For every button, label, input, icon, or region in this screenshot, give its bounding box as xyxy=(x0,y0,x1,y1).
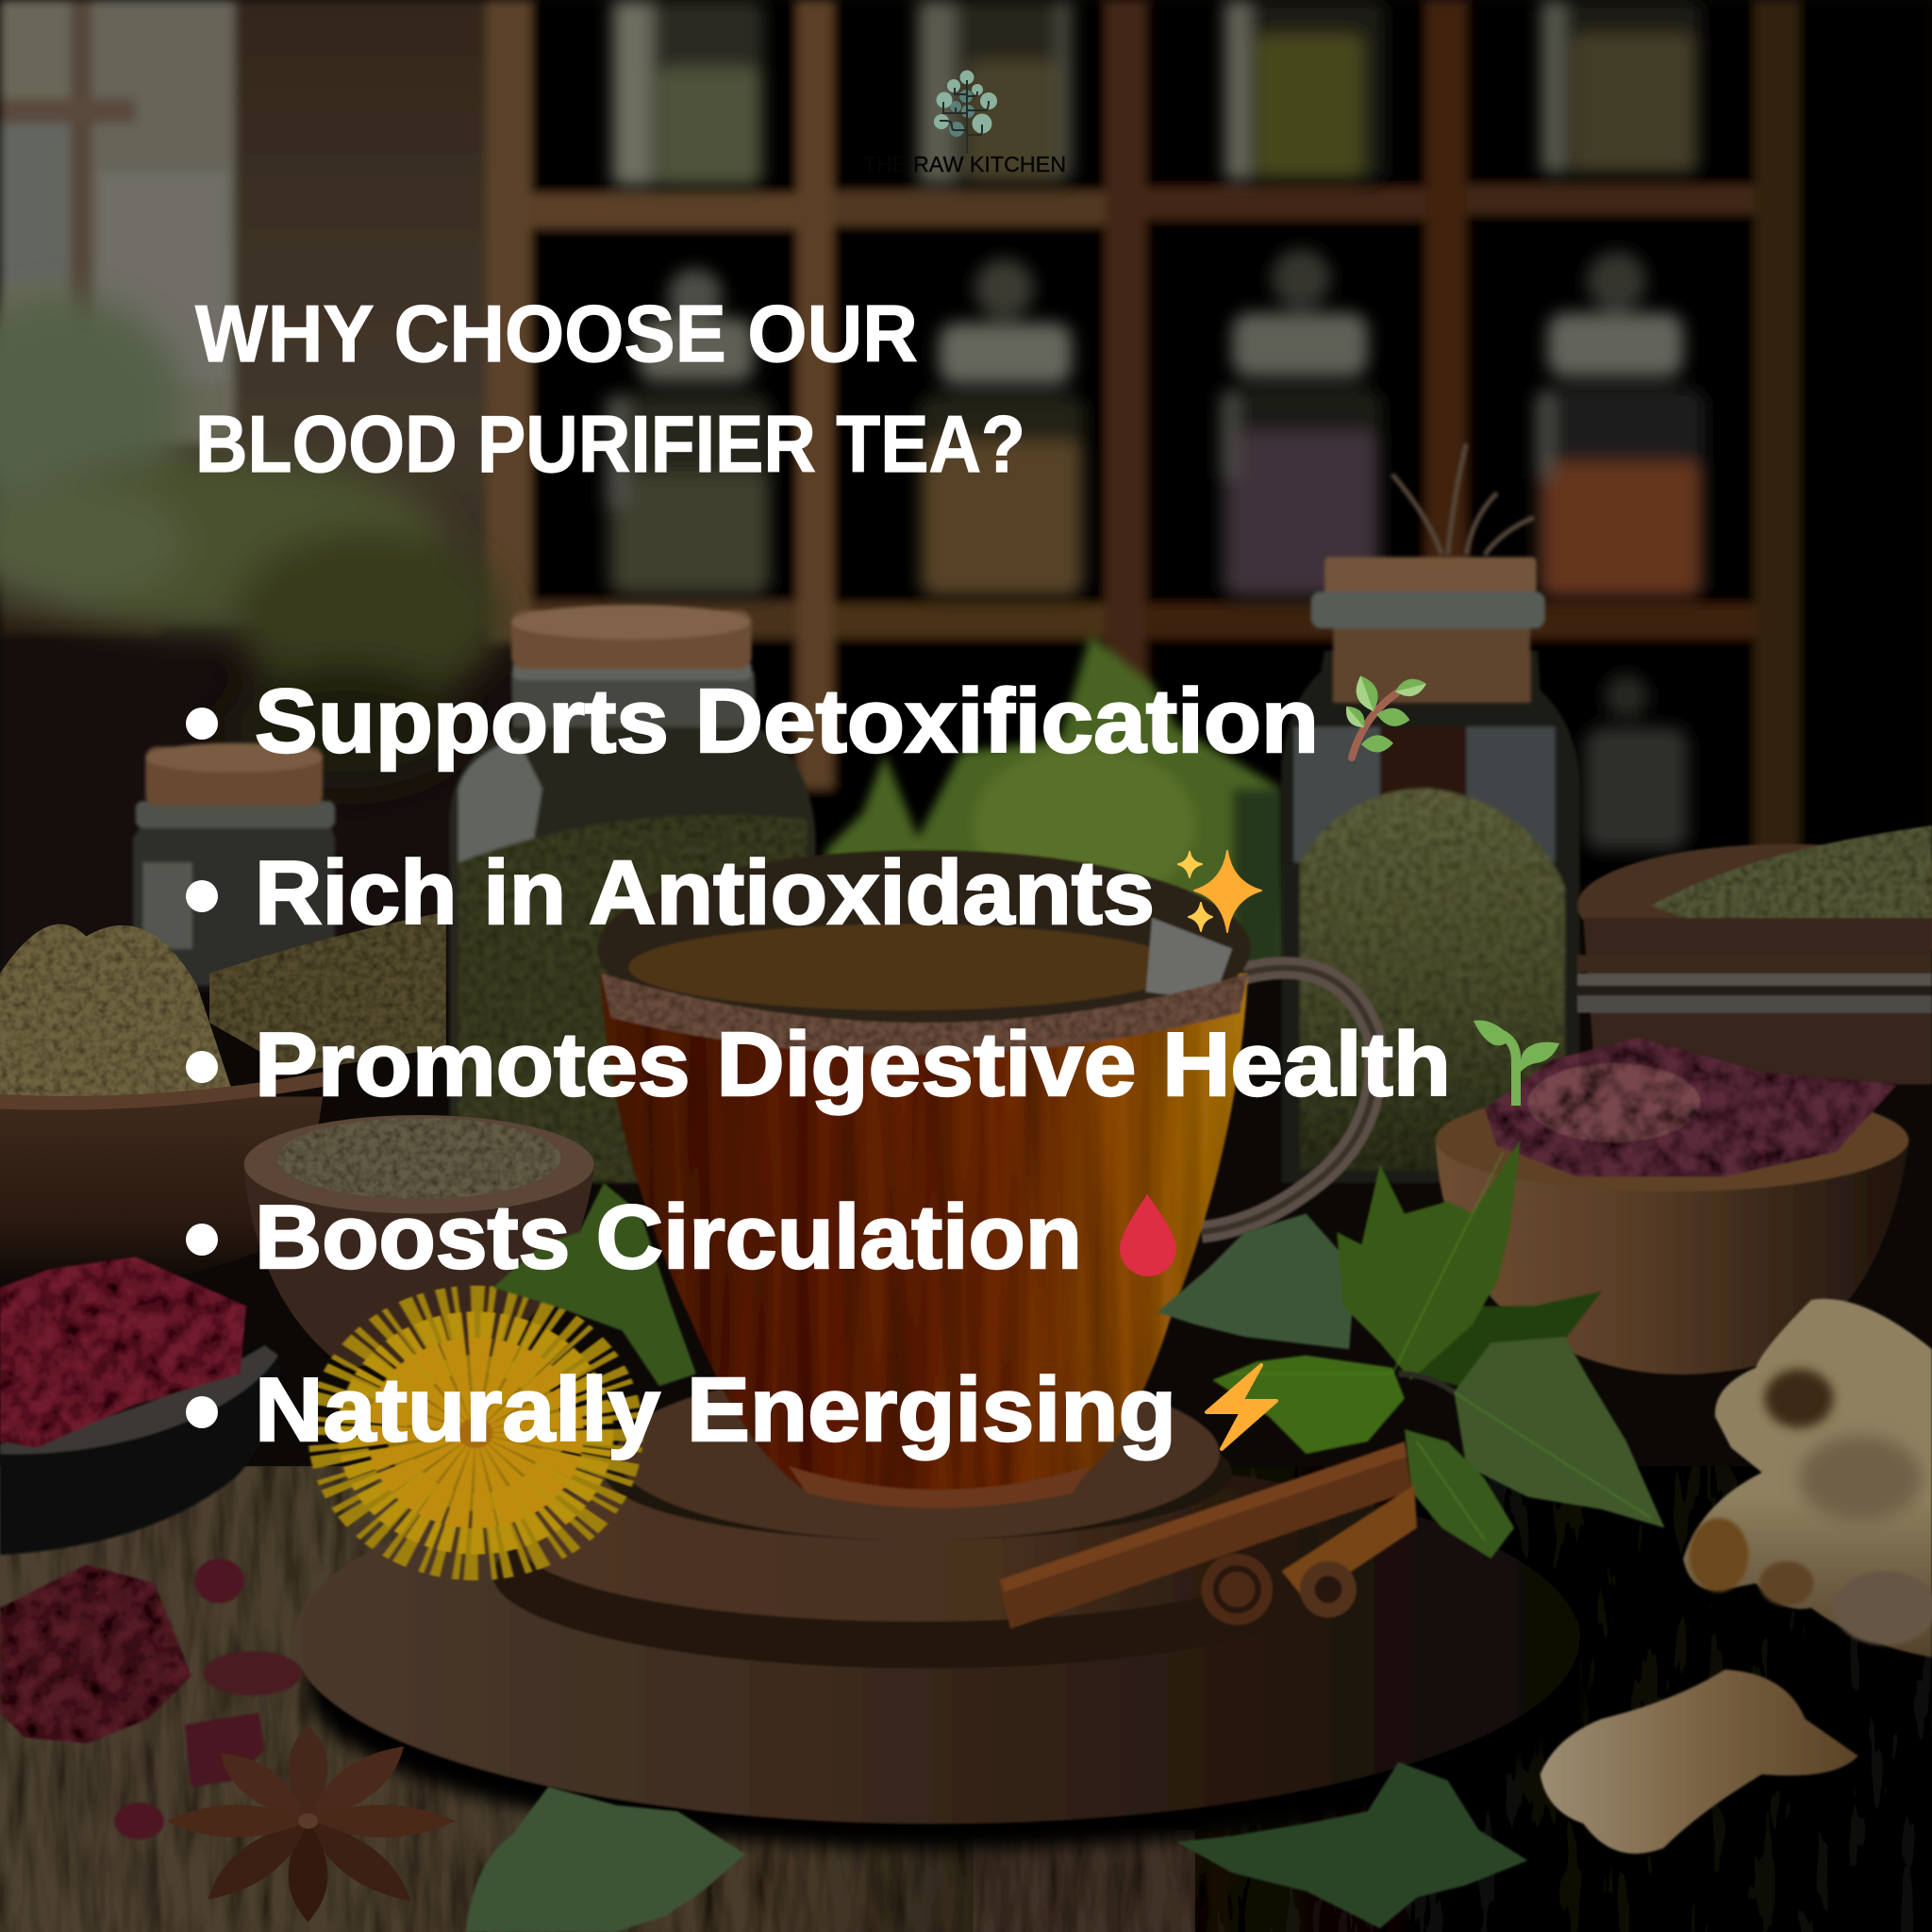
hibiscus and dark bowl left xyxy=(0,1257,281,1555)
blurred green foliage at left xyxy=(0,295,506,789)
hay and wooden bowl left xyxy=(0,912,446,1300)
wooden serving plates xyxy=(293,1368,1590,1848)
cinnamon sticks xyxy=(998,1441,1417,1629)
ginger root large xyxy=(1683,1299,1932,1657)
ginger root small xyxy=(1541,1670,1858,1854)
icon: herb xyxy=(1341,673,1428,758)
logo tree icon xyxy=(934,70,997,153)
big glass jar left xyxy=(450,605,816,1183)
icon: sparkles xyxy=(1178,851,1261,932)
benefit: Supports Detoxification: Supports Detoxification xyxy=(255,671,1319,772)
benefit: Boosts Circulation: Boosts Circulation xyxy=(255,1187,1082,1288)
rough wooden table xyxy=(0,1466,1932,1932)
blurred jars on shelves xyxy=(607,0,1706,850)
benefit: Rich in Antioxidants: Rich in Antioxidants xyxy=(255,842,1155,943)
title: WHY CHOOSE OUR xyxy=(195,290,918,379)
glass tea cup xyxy=(597,850,1375,1508)
icon: blood drop xyxy=(1120,1194,1176,1276)
icon: lightning bolt xyxy=(1207,1365,1276,1449)
blurred background: window, wall and wooden shelves xyxy=(0,0,1932,991)
dandelion flower xyxy=(338,1311,613,1555)
right wooden bowl with dried hibiscus xyxy=(1436,1038,1909,1374)
dried petals on table xyxy=(0,1558,302,1840)
logo: The Raw Kitchen xyxy=(863,70,1066,176)
icon: seedling xyxy=(1474,1020,1559,1106)
green leaf behind dandelion xyxy=(492,1183,696,1386)
small bowl with ground herbs xyxy=(244,1115,594,1368)
logo wordmark: THE RAW KITCHEN xyxy=(863,152,1066,176)
benefit: Naturally Energising: Naturally Energising xyxy=(255,1359,1176,1460)
upper right tray with greens xyxy=(1577,825,1932,1084)
front leaves on table xyxy=(466,1762,1528,1932)
large jar right with moss xyxy=(1281,443,1579,1183)
green leaves right of cup xyxy=(1157,1140,1665,1558)
small corked jar left xyxy=(133,743,335,986)
bright green herbs behind cup xyxy=(825,635,1288,974)
title xyxy=(195,290,1025,490)
benefit: Promotes Digestive Health: Promotes Digestive Health xyxy=(255,1014,1451,1115)
title: BLOOD PURIFIER TEA? xyxy=(195,400,1025,490)
star anise xyxy=(166,1725,456,1922)
benefits list xyxy=(186,671,1559,1460)
